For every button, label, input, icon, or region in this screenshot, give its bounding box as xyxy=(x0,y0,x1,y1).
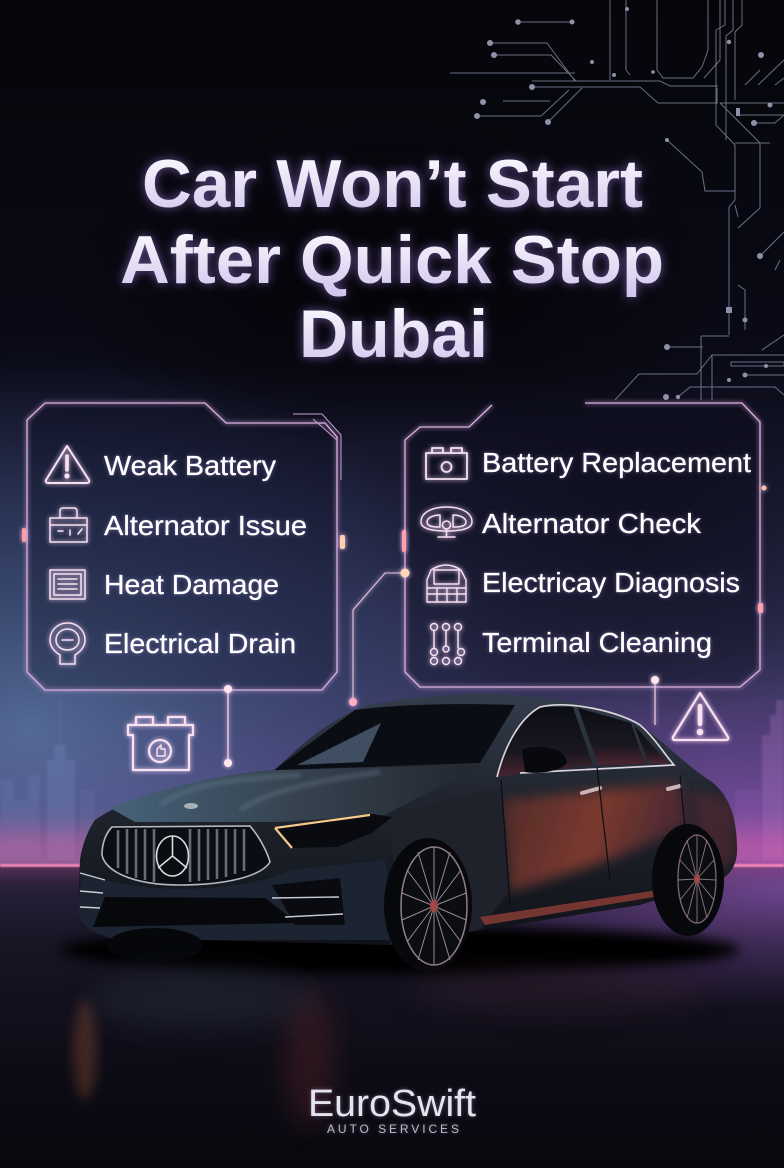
title xyxy=(120,146,664,372)
car: body xyxy=(78,694,737,945)
icon: terminals xyxy=(430,624,464,664)
car: lower intake xyxy=(93,897,297,927)
car: fender shade xyxy=(385,787,510,945)
text: Heat Damage: Heat Damage xyxy=(104,569,279,600)
title line 1: Car Won’t Start xyxy=(142,146,643,222)
panel border xyxy=(405,403,760,687)
horizon glow xyxy=(0,832,784,867)
title line 3: Dubai xyxy=(299,296,488,372)
car xyxy=(60,694,740,974)
car: windshield xyxy=(274,704,515,770)
car: bumper stripes xyxy=(80,873,343,917)
car: side intake xyxy=(272,878,345,925)
icon: diagnosis device xyxy=(427,565,466,602)
logo wordmark: EuroSwift xyxy=(308,1083,476,1125)
car: front bumper xyxy=(78,860,395,940)
car: underbody shadow xyxy=(60,926,740,974)
car: sill light xyxy=(480,890,660,925)
skyline xyxy=(0,697,784,860)
connector: car to right panel xyxy=(349,568,410,706)
text: Electricay Diagnosis: Electricay Diagnosis xyxy=(482,567,740,598)
icon: toolbox battery xyxy=(50,508,87,542)
text: Alternator Issue: Alternator Issue xyxy=(104,510,307,541)
icon: battery floating xyxy=(128,717,193,770)
icon: warning triangle xyxy=(46,446,89,483)
car: hood xyxy=(110,765,480,822)
logo xyxy=(308,1083,476,1136)
car: hood badge xyxy=(184,803,198,809)
icon: battery xyxy=(426,448,467,479)
car: front-left tyre xyxy=(107,928,203,962)
icon: light bulb xyxy=(50,623,85,664)
icon: heat panel xyxy=(50,570,85,599)
car: grille xyxy=(102,826,270,885)
car: front wheel xyxy=(384,838,472,972)
icon: alternator scanner xyxy=(421,507,472,537)
car: chrome trim xyxy=(497,705,674,777)
panel: fixes xyxy=(402,403,766,687)
connector: panel to battery icon xyxy=(224,685,232,767)
text: Alternator Check: Alternator Check xyxy=(482,508,702,539)
title line 2: After Quick Stop xyxy=(120,222,664,298)
car: door red reflection xyxy=(502,782,737,892)
panel fill xyxy=(405,403,760,687)
car: hood creases xyxy=(160,772,380,810)
car: headlight xyxy=(274,814,392,848)
car: door handles xyxy=(582,786,680,793)
panel accent nodes xyxy=(22,528,345,549)
car: door shut lines xyxy=(501,767,687,905)
text: Terminal Cleaning: Terminal Cleaning xyxy=(482,627,712,658)
car: badge xyxy=(156,836,188,876)
panel: causes xyxy=(22,403,345,690)
floor reflections xyxy=(73,968,710,1130)
panel fill xyxy=(27,403,337,690)
car: side windows xyxy=(497,707,669,777)
connector: panel to warning xyxy=(651,676,659,725)
text: Battery Replacement: Battery Replacement xyxy=(482,447,751,478)
panel accent nodes xyxy=(402,486,766,613)
car: headlight DRL xyxy=(275,815,370,848)
logo subtitle: AUTO SERVICES xyxy=(327,1122,459,1136)
panel border xyxy=(27,403,337,690)
text: Weak Battery: Weak Battery xyxy=(104,450,276,481)
icon: warning floating xyxy=(673,693,728,740)
car: rear wheel xyxy=(652,824,724,936)
car: windshield reflection xyxy=(297,723,381,765)
circuit board lines xyxy=(450,0,784,400)
text: Electrical Drain: Electrical Drain xyxy=(104,628,296,659)
car: mirror xyxy=(522,747,567,773)
